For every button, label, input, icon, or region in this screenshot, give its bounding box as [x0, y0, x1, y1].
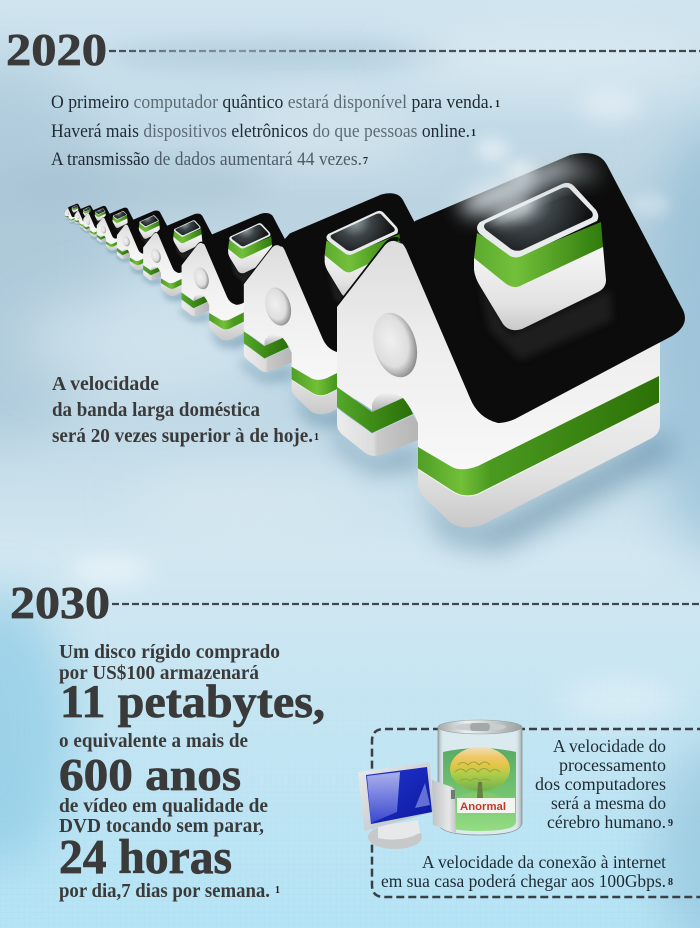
text block: home connection speed	[381, 852, 673, 891]
title: 2020: 2020	[6, 24, 107, 75]
icon: house 1	[324, 153, 685, 548]
text block: hard disk capacity: por US$100 armazenará	[59, 662, 259, 684]
icon: house 2	[236, 193, 449, 426]
text block: hard disk capacity: 1	[275, 885, 280, 896]
line: devices online: 1	[471, 128, 476, 139]
icon: computer monitor	[358, 762, 456, 849]
line: devices online: Haverá mais dispositivos eletrônicos do que pessoas online.	[51, 121, 470, 142]
text block: processing speed: processamento	[559, 755, 666, 775]
icon: house 5	[115, 210, 173, 274]
icon: house 4	[140, 214, 220, 301]
text block: hard disk capacity: DVD tocando sem parar,	[59, 815, 264, 837]
callout: dashed box	[372, 729, 700, 897]
icon: house 3	[177, 213, 300, 347]
text block: home broadband speed	[52, 373, 319, 447]
illustration: row of houses	[64, 138, 685, 548]
dashed line: 2030	[112, 603, 700, 605]
text block: processing speed: A velocidade do	[553, 736, 666, 756]
text block: hard disk capacity: 600 anos	[59, 750, 241, 800]
text block: home broadband speed: da banda larga doméstica	[52, 399, 260, 421]
text block: hard disk capacity	[59, 641, 325, 902]
text block: 2020 predictions	[51, 92, 500, 170]
icon: house 9	[64, 204, 82, 223]
text block: hard disk capacity: 24 horas	[59, 829, 232, 884]
title: 2030: 2030	[10, 577, 110, 628]
line: quantum computer: 1	[495, 99, 500, 110]
text block: home broadband speed: 1	[314, 432, 319, 443]
icon: house 6	[95, 208, 137, 253]
text block: hard disk capacity: por dia,7 dias por semana.	[59, 880, 270, 902]
text block: home broadband speed: A velocidade	[52, 373, 159, 395]
roof haze	[455, 138, 600, 230]
text block: processing speed	[535, 736, 673, 832]
text block: home connection speed: A velocidade da conexão à internet	[422, 852, 666, 872]
jar label: Anormal	[460, 801, 506, 813]
icon: house 8	[74, 205, 96, 229]
text block: home connection speed: em sua casa poderá chegar aos 100Gbps.	[381, 871, 666, 891]
text block: processing speed: 9	[668, 818, 673, 829]
text block: hard disk capacity: de vídeo em qualidade de	[59, 795, 268, 817]
line: data transmission: 7	[363, 156, 368, 167]
line: data transmission: A transmissão de dados aumentará 44 vezes.	[51, 149, 362, 170]
text block: hard disk capacity: 11 petabytes,	[60, 676, 325, 728]
text block: hard disk capacity: Um disco rígido comprado	[59, 641, 280, 663]
icon: house 7	[82, 206, 113, 239]
text block: processing speed: cérebro humano.	[547, 812, 666, 832]
line: quantum computer: O primeiro computador quântico estará disponível para venda.	[51, 92, 493, 113]
text block: hard disk capacity: o equivalente a mais de	[59, 730, 248, 752]
text block: processing speed: dos computadores	[535, 774, 666, 794]
icon: brain in jar	[438, 720, 522, 835]
text block: home broadband speed: será 20 vezes superior à de hoje.	[52, 425, 313, 447]
dashed line: 2020	[109, 50, 700, 52]
text block: processing speed: será a mesma do	[551, 793, 666, 813]
text block: home connection speed: 8	[668, 877, 673, 888]
